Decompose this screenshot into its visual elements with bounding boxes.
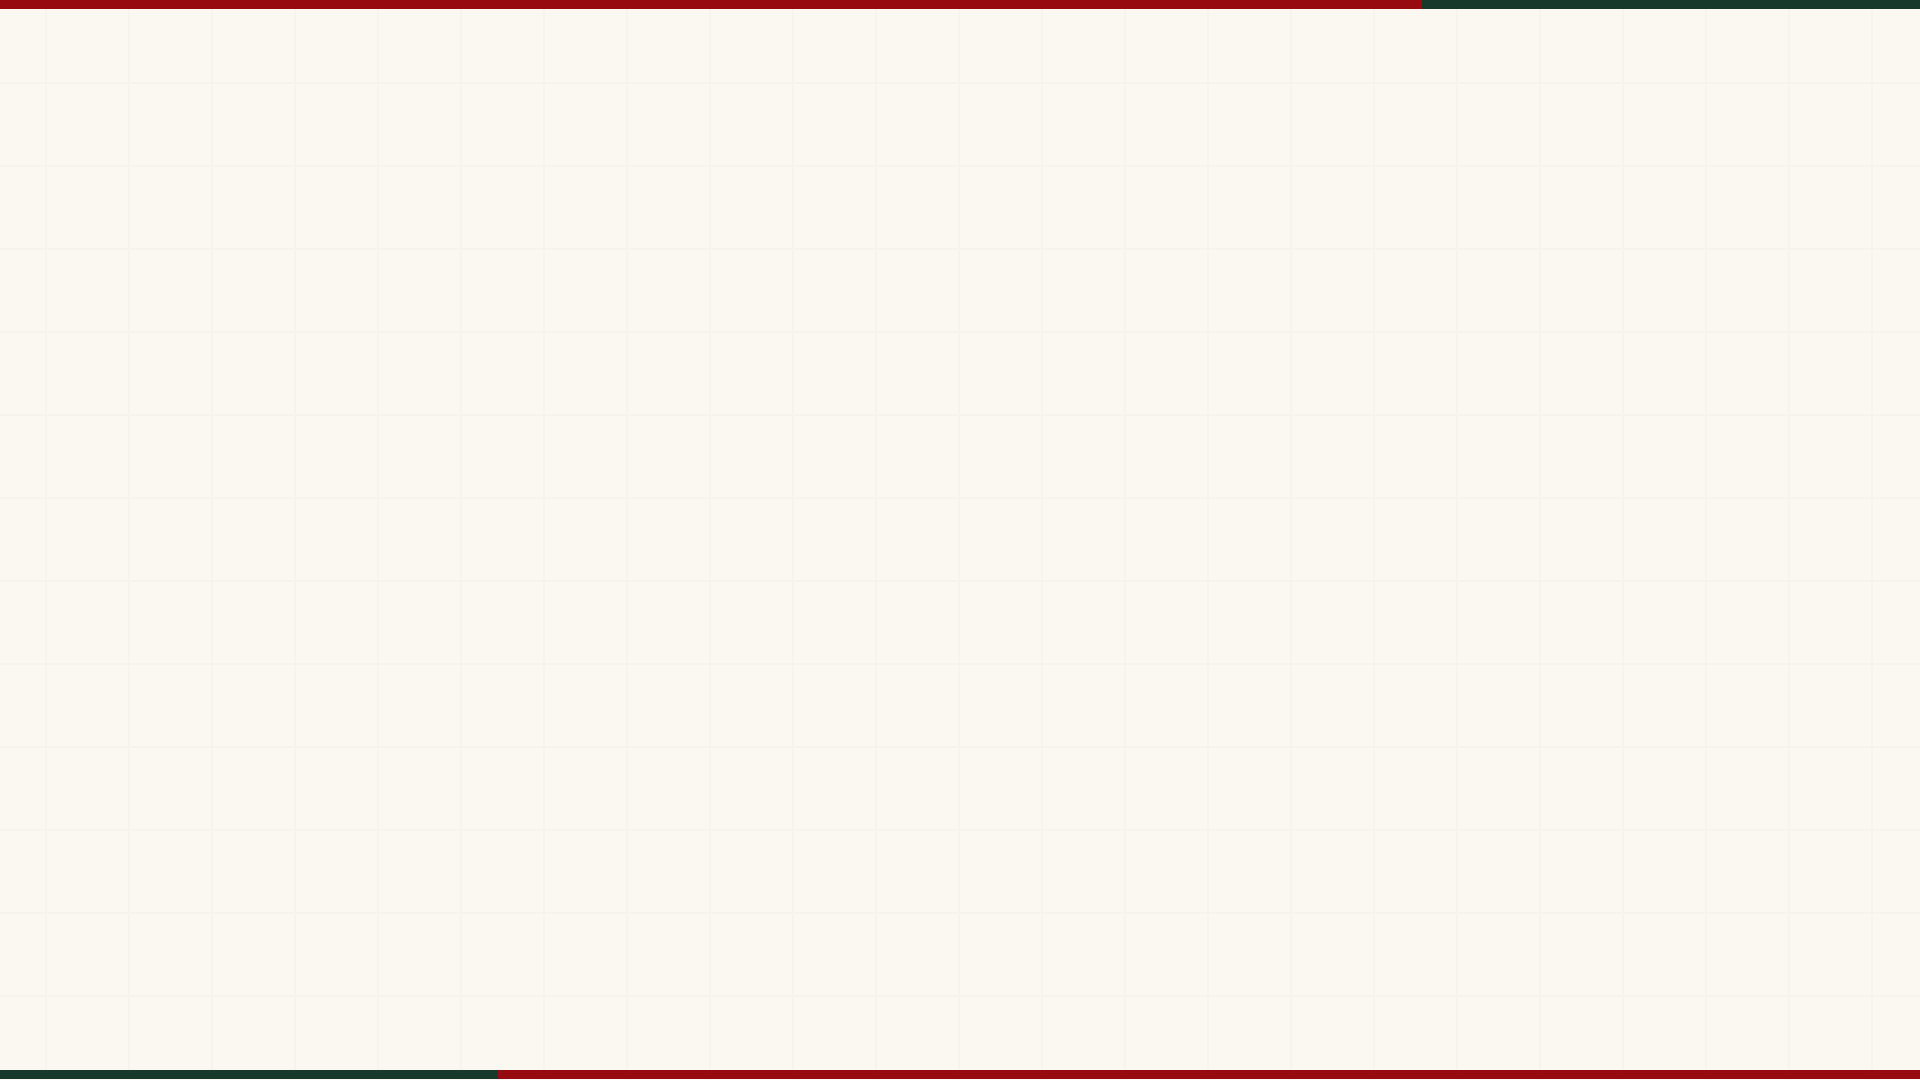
bottom accent bar (0, 1070, 1920, 1079)
top accent bar (0, 0, 1920, 9)
